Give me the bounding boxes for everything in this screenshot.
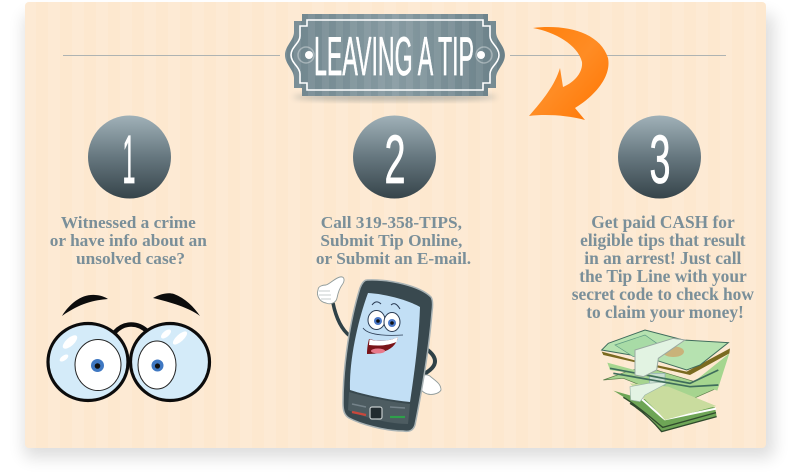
icon: glasses with eyes [48,293,210,400]
step 3 text: Get paid CASH for [591,212,735,232]
title banner: LEAVING A TIP [314,25,474,87]
step 3 number disc: 3 [650,121,670,198]
step 2 number disc [353,116,436,198]
step 3 text: eligible tips that result [580,230,746,250]
step 3 text: to claim your money! [586,302,744,322]
step 2 number disc: 2 [384,121,406,198]
step 2 text: or Submit an E-mail. [316,249,471,268]
icon: smiling phone [317,277,441,431]
step 1 number disc [88,116,171,198]
arrow [529,27,609,120]
step 1 text: Witnessed a crime [61,213,196,232]
step 1 text: unsolved case? [76,249,185,268]
step 2 text: Call 319-358-TIPS, [321,213,462,232]
step 1 text: or have info about an [50,231,207,250]
icon: stacks of cash [602,330,730,432]
step 3 text: in an arrest! Just call [584,248,742,268]
divider lines [63,54,726,56]
title banner [285,14,505,101]
step 1 number disc: 1 [122,121,136,198]
step 3 text: the Tip Line with your [579,266,747,286]
step 3 number disc [618,116,701,198]
step 2 text: Submit Tip Online, [320,231,462,250]
step 3 text: secret code to check how [572,284,754,304]
